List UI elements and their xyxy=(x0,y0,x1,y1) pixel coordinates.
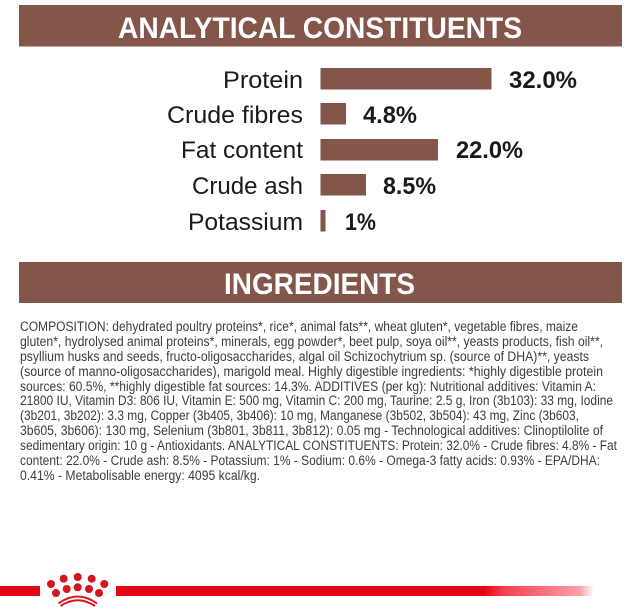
panel: analytical constituents heading xyxy=(19,5,622,46)
row: fat content: Fat content xyxy=(181,137,303,164)
row: fat content: 22.0% xyxy=(456,137,523,164)
row: protein xyxy=(223,67,577,94)
row: potassium: 1% xyxy=(345,209,376,236)
footer: red line right with fade xyxy=(116,586,594,596)
heading: analytical constituents: ANALYTICAL CONSTITUENTS xyxy=(118,12,522,45)
footer: red line left xyxy=(0,586,40,596)
icon: royal canin crown logo xyxy=(47,573,108,606)
row: protein: Protein xyxy=(223,67,303,94)
row: crude ash: 8.5% xyxy=(383,173,436,200)
row: potassium: Potassium xyxy=(188,209,303,236)
bar chart: analytical constituents xyxy=(167,67,577,236)
row: protein: 32.0% xyxy=(509,67,577,94)
text block: composition: 0.41% - Metabolisable energy: 4095 kcal/kg. xyxy=(20,468,260,483)
heading: ingredients: INGREDIENTS xyxy=(224,268,415,301)
text block: composition xyxy=(20,319,617,483)
row: crude fibres: 4.8% xyxy=(363,102,417,129)
row: crude fibres: Crude fibres xyxy=(167,102,303,129)
row: crude ash: Crude ash xyxy=(192,173,303,200)
row: fat content xyxy=(181,137,523,164)
row: potassium xyxy=(188,209,376,236)
row: crude fibres xyxy=(167,102,417,129)
panel: ingredients heading xyxy=(19,262,622,303)
row: crude ash xyxy=(192,173,436,200)
